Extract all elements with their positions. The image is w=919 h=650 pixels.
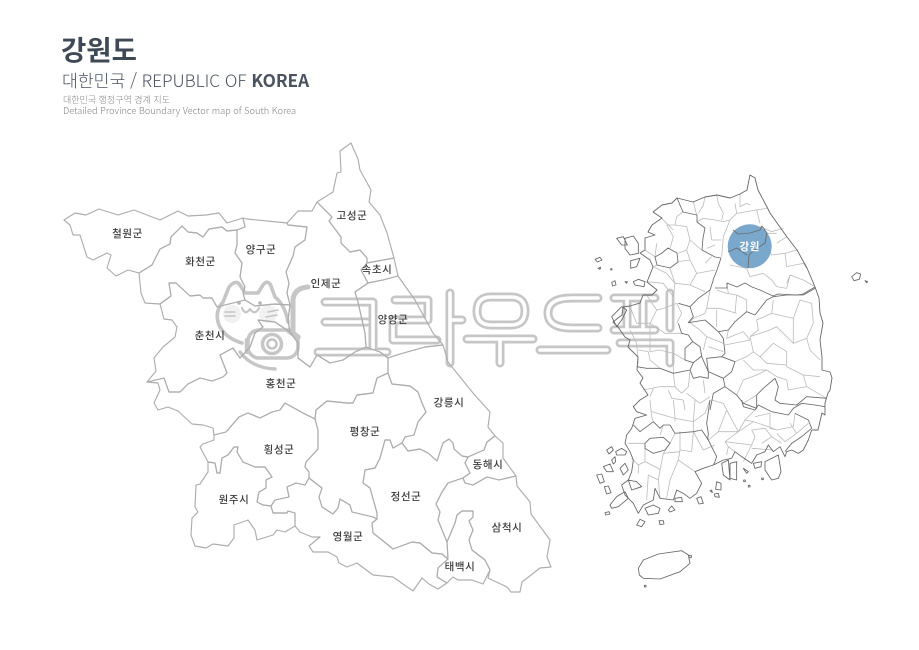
district: 고성군 — [317, 143, 394, 263]
mainland coast south — [622, 407, 812, 513]
watermark cat with camera — [217, 282, 308, 369]
district labels: 속초시 — [362, 262, 392, 277]
province boundaries centre — [637, 280, 827, 410]
district: 평창군 — [305, 373, 426, 519]
district labels: 영월군 — [333, 529, 363, 544]
district: 강릉시 — [388, 345, 495, 461]
district labels: 태백시 — [445, 559, 475, 574]
district labels: 정선군 — [391, 489, 421, 504]
district labels: 양양군 — [378, 312, 408, 327]
island: jeju — [638, 551, 691, 587]
district labels: 양구군 — [246, 242, 276, 257]
district: 영월군 — [271, 478, 448, 591]
district labels: 인제군 — [311, 276, 341, 291]
district labels: 화천군 — [185, 254, 216, 269]
district: 철원군 — [64, 209, 245, 276]
district: 태백시 — [437, 511, 490, 584]
highlight label: 강원 — [740, 239, 760, 254]
district: 양구군 — [235, 218, 307, 306]
district labels: 고성군 — [337, 208, 367, 223]
municipal boundaries south — [628, 400, 808, 500]
description korean: 대한민국 행정구역 경계 지도 — [63, 93, 170, 106]
district labels: 홍천군 — [266, 376, 296, 391]
district: 원주시 — [191, 447, 295, 548]
district labels: 삼척시 — [492, 520, 522, 535]
province boundaries south — [633, 400, 825, 465]
district: 인제군 — [286, 202, 368, 367]
district: 양양군 — [355, 276, 443, 358]
district labels: 철원군 — [112, 226, 143, 241]
district: 삼척시 — [436, 476, 551, 592]
highlight circle: gangwon — [728, 224, 772, 268]
subtitle: 대한민국 / REPUBLIC OF KOREA — [62, 67, 310, 92]
title: 강원도 — [61, 28, 137, 68]
district labels: 동해시 — [473, 457, 503, 472]
district labels: 횡성군 — [264, 442, 294, 457]
municipal boundaries north — [645, 194, 815, 297]
district labels: 강릉시 — [434, 395, 464, 410]
district labels — [112, 208, 522, 574]
locator map: south korea — [595, 175, 868, 587]
district: 홍천군 — [147, 320, 388, 435]
islands south — [597, 447, 781, 527]
municipal boundaries centre — [630, 283, 827, 410]
mainland coast north — [613, 175, 832, 430]
district labels: 원주시 — [219, 492, 249, 507]
district: 속초시 — [361, 258, 398, 283]
district: 횡성군 — [200, 403, 318, 506]
map: gangwon province districts — [64, 143, 551, 592]
islands north — [595, 236, 868, 327]
province boundaries north — [655, 198, 815, 296]
district: 화천군 — [139, 226, 245, 307]
description english: Detailed Province Boundary Vector map of South Korea — [63, 103, 296, 117]
district labels: 평창군 — [350, 424, 380, 439]
district: 춘천시 — [147, 283, 290, 392]
district: 정선군 — [363, 439, 470, 559]
district labels: 춘천시 — [195, 328, 225, 343]
watermark wordmark — [318, 293, 670, 363]
district: 동해시 — [463, 436, 516, 485]
